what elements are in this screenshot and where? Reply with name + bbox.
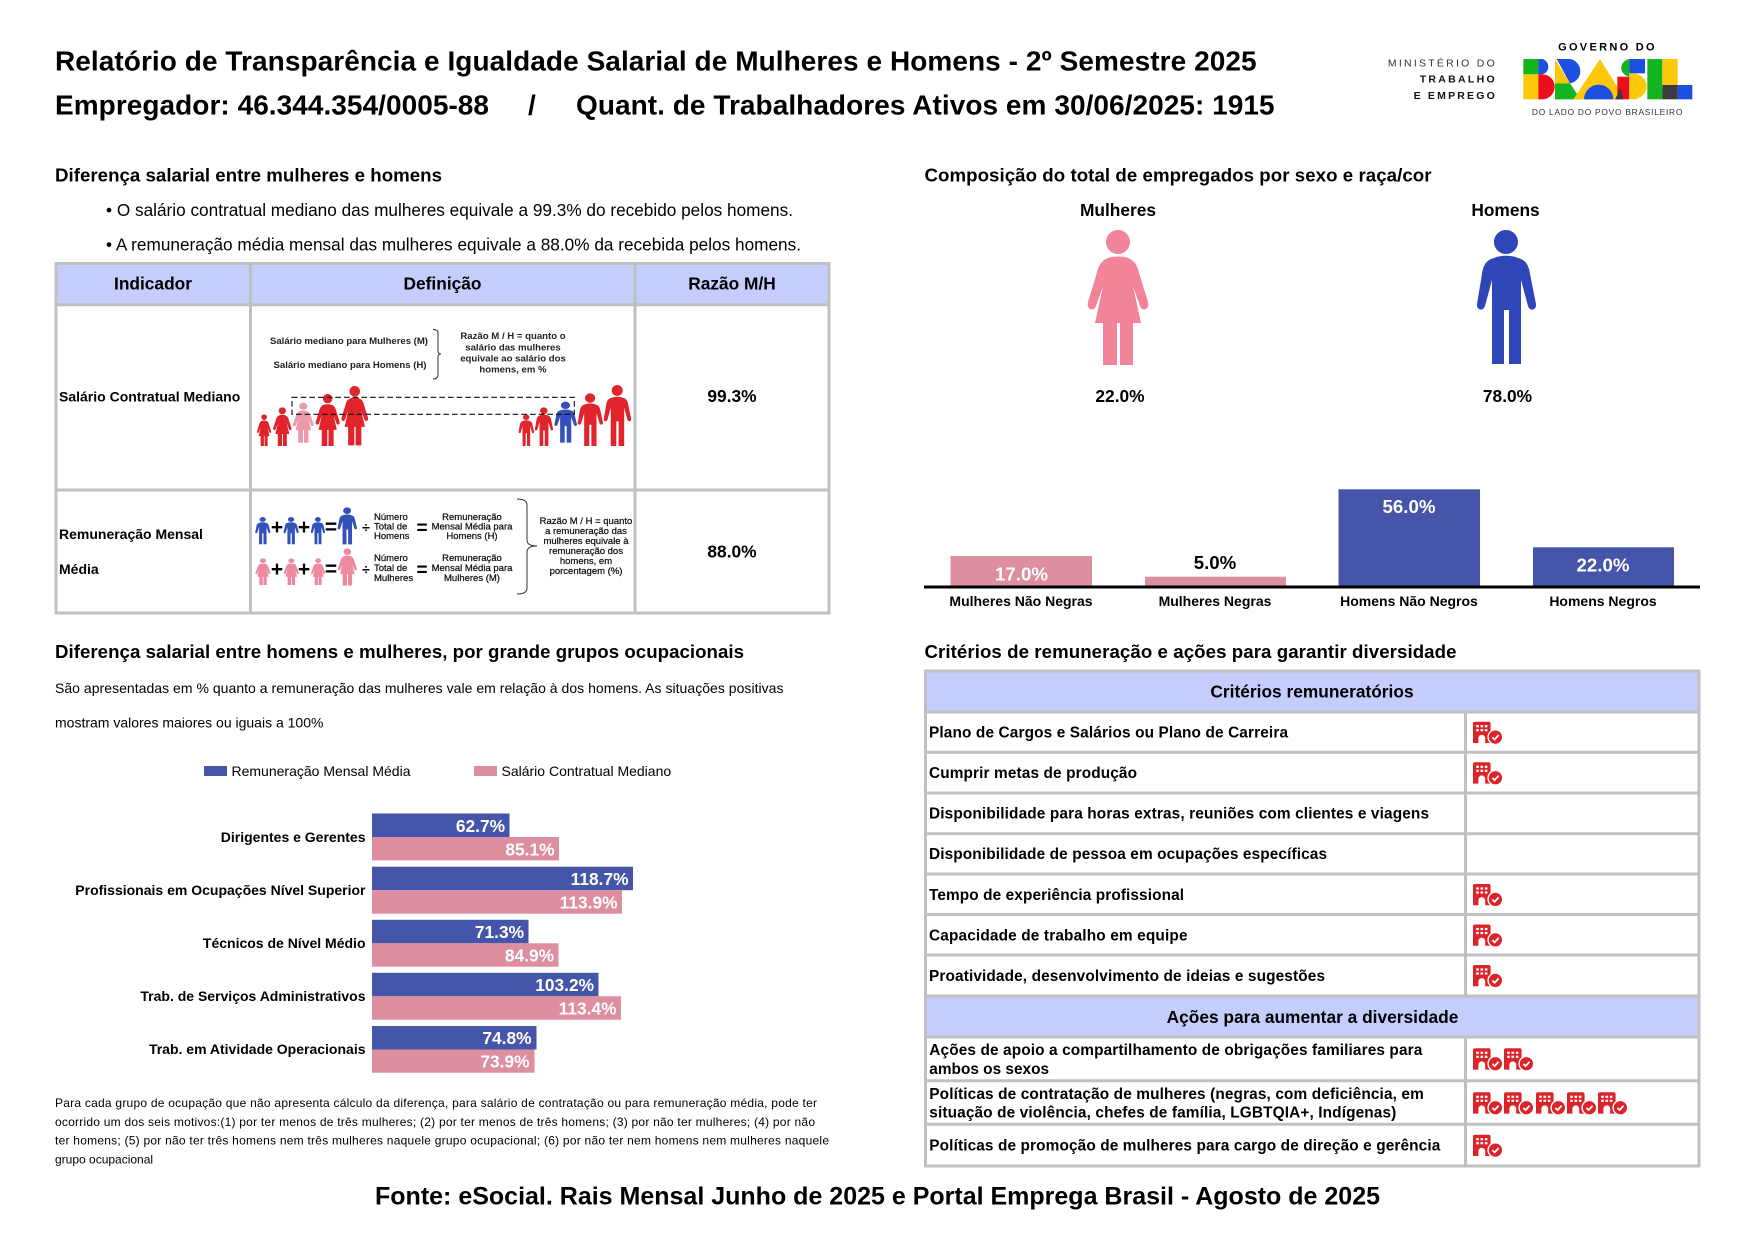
diagram: remuneração média: Mensal Média para — [432, 563, 513, 574]
table: indicadores: Razão M/H — [688, 274, 776, 294]
diagram: remuneração média: ÷ — [362, 519, 370, 535]
bar chart: ocupações: 71.3% — [475, 922, 524, 942]
bar chart: ocupações: Trab. de Serviços Administrativos — [140, 988, 366, 1004]
bar chart: ocupações: 74.8% — [482, 1028, 532, 1048]
bar chart: ocupações: 113.4% — [559, 999, 616, 1019]
diagram: remuneração média: Remuneração — [442, 553, 502, 564]
diagram: remuneração média: Homens (H) — [446, 531, 498, 542]
bar chart: sexo e raça: Homens Negros — [1549, 593, 1657, 609]
table: critérios: Ações de apoio a compartilhamento de obrigações familiares para — [929, 1042, 1423, 1059]
legend: Salário Contratual Mediano — [502, 763, 671, 779]
diagram: remuneração média: Número — [374, 512, 408, 523]
bar chart: ocupações: Profissionais em Ocupações Nível Superior — [75, 882, 366, 898]
diagram: remuneração média: Total de — [374, 563, 407, 574]
diagram: remuneração média: porcentagem (%) — [550, 566, 622, 577]
footnote: ocorrido um dos seis motivos:(1) por ter menos de três mulheres; (2) por ter menos de três homens; (3) por não ter mulheres; (4) por não — [55, 1115, 815, 1129]
diagram: remuneração média: Razão M / H = quanto — [540, 516, 632, 527]
footnote: Para cada grupo de ocupação que não apresenta cálculo da diferença, para salário de contratação ou para remuneração média, pode ter — [55, 1096, 817, 1110]
bar chart: sexo e raça: Mulheres Negras — [1159, 593, 1272, 609]
bullets: • A remuneração média mensal das mulheres equivale a 88.0% da recebida pelos homens. — [106, 234, 801, 254]
diagram: salário mediano — [257, 330, 631, 446]
diagram: remuneração média — [255, 499, 632, 594]
title: Relatório de Transparência e Igualdade Salarial de Mulheres e Homens - 2º Semestre 2025 — [55, 46, 1257, 76]
title: Quant. de Trabalhadores Ativos em 30/06/2025: 1915 — [576, 90, 1275, 120]
diagram: remuneração média: + — [271, 516, 283, 539]
legend — [204, 763, 671, 779]
logo: governo do brasil: DO LADO DO POVO BRASILEIRO — [1532, 107, 1683, 117]
table: critérios: Políticas de contratação de mulheres (negras, com deficiência, em — [929, 1086, 1424, 1103]
title: / — [528, 90, 536, 120]
pictogram: mulheres: Mulheres — [1080, 200, 1156, 220]
bar chart: ocupações — [75, 814, 633, 1073]
panel: grupos ocupacionais — [55, 641, 829, 1166]
table: critérios — [926, 671, 1699, 1166]
table: critérios: Disponibilidade para horas extras, reuniões com clientes e viagens — [929, 806, 1429, 822]
pictogram: homens — [1471, 200, 1540, 406]
footnote: grupo ocupacional — [55, 1152, 153, 1166]
bar chart: sexo e raça: 22.0% — [1577, 554, 1630, 576]
table: indicadores: 99.3% — [707, 386, 757, 406]
table: critérios: Tempo de experiência profissional — [929, 887, 1184, 904]
logo: ministério do trabalho e emprego: MINISTÉRIO DO — [1388, 56, 1497, 70]
table: critérios: Plano de Cargos e Salários ou Plano de Carreira — [929, 724, 1288, 742]
bar chart: ocupações: Trab. em Atividade Operacionais — [149, 1041, 366, 1057]
row: remuneração: Remuneração Mensal — [59, 526, 203, 542]
diagram: remuneração média: + — [298, 558, 310, 581]
heading: Composição do total de empregados por sexo e raça/cor — [924, 164, 1432, 186]
icons: critérios adotados — [1473, 722, 1628, 1158]
diagram: remuneração média: Mulheres (M) — [444, 573, 500, 584]
diagram: remuneração média: ÷ — [362, 561, 370, 577]
diagram: salário mediano: salário das mulheres — [465, 342, 561, 354]
table: critérios: Capacidade de trabalho em equipe — [929, 928, 1188, 944]
table: critérios: Cumprir metas de produção — [929, 765, 1137, 782]
pictogram: mulheres: 22.0% — [1095, 386, 1145, 406]
diagram: remuneração média: Número — [374, 553, 408, 564]
source line: Fonte: eSocial. Rais Mensal Junho de 2025 e Portal Emprega Brasil - Agosto de 2025 — [375, 1182, 1380, 1210]
panel: critérios — [924, 641, 1699, 1166]
table: indicadores: Indicador — [114, 274, 192, 294]
logo: ministério do trabalho e emprego — [1388, 56, 1497, 102]
diagram: remuneração média: Remuneração — [442, 512, 502, 523]
diagram: remuneração média: = — [416, 518, 428, 539]
table: indicadores: Definição — [404, 274, 482, 294]
subtitle — [55, 680, 784, 730]
diagram: remuneração média: Total de — [374, 522, 407, 532]
bullets: • O salário contratual mediano das mulheres equivale a 99.3% do recebido pelos homens. — [106, 200, 793, 220]
logo: ministério do trabalho e emprego: TRABALHO — [1420, 74, 1497, 86]
pictogram: homens: Homens — [1471, 200, 1540, 220]
table: critérios: Ações para aumentar a diversidade — [1167, 1007, 1459, 1027]
footnote: ter homens; (5) por não ter três homens nem três mulheres naquele grupo ocupacional; (6) por não ter nem homens nem mulheres naquele — [55, 1134, 829, 1148]
diagram: salário mediano: Razão M / H = quanto o — [460, 331, 566, 342]
heading: Diferença salarial entre homens e mulheres, por grande grupos ocupacionais — [55, 641, 744, 662]
title — [55, 46, 1275, 120]
heading: Critérios de remuneração e ações para garantir diversidade — [924, 641, 1456, 662]
heading: Diferença salarial entre mulheres e homens — [55, 164, 442, 186]
diagram: remuneração média: remuneração dos — [549, 546, 623, 557]
diagram: salário mediano: homens, em % — [479, 364, 547, 376]
diagram: remuneração média: homens, em — [560, 556, 612, 567]
table: critérios: Políticas de promoção de mulheres para cargo de direção e gerência — [929, 1138, 1441, 1154]
diagram: remuneração média: a remuneração das — [545, 526, 627, 537]
diagram: remuneração média: mulheres equivale à — [543, 536, 629, 547]
diagram: remuneração média: Homens — [374, 531, 410, 542]
diagram: salário mediano: equivale ao salário dos — [460, 354, 566, 364]
bar chart: sexo e raça: Homens Não Negros — [1340, 593, 1478, 609]
title: Empregador: 46.344.354/0005-88 — [55, 90, 489, 120]
diagram: remuneração média: + — [271, 558, 283, 581]
footnote — [55, 1096, 829, 1166]
bar chart: ocupações: 103.2% — [535, 975, 594, 995]
row: salário contratual: Salário Contratual Mediano — [59, 388, 240, 404]
diagram: salário mediano: Salário mediano para Homens (H) — [274, 360, 426, 371]
bar chart: ocupações: 73.9% — [480, 1052, 530, 1072]
bar chart: ocupações: 118.7% — [571, 869, 628, 889]
diagram: salário mediano: Salário mediano para Mulheres (M) — [270, 336, 428, 347]
table: critérios: Disponibilidade de pessoa em ocupações específicas — [929, 846, 1327, 863]
diagram: remuneração média: + — [298, 516, 310, 539]
diagram: remuneração média: Mulheres — [374, 573, 413, 584]
table: indicadores: 88.0% — [707, 542, 757, 562]
panel: composição — [924, 164, 1700, 609]
bar chart: ocupações: 62.7% — [456, 816, 505, 836]
table: critérios: Proatividade, desenvolvimento de ideias e sugestões — [929, 968, 1325, 985]
bar chart: sexo e raça — [924, 489, 1700, 609]
diagram: remuneração média: Mensal Média para — [432, 522, 513, 532]
bar chart: sexo e raça: 56.0% — [1383, 496, 1436, 517]
table: critérios: Critérios remuneratórios — [1210, 682, 1414, 702]
table: critérios: situação de violência, chefes de família, LGBTQIA+, Indígenas) — [929, 1105, 1396, 1122]
diagram: remuneração média: = — [325, 558, 337, 581]
diagram: remuneração média: = — [325, 516, 337, 539]
bar chart: sexo e raça: 17.0% — [995, 564, 1048, 584]
bar chart: sexo e raça: Mulheres Não Negras — [949, 593, 1093, 609]
bar chart: sexo e raça: 5.0% — [1194, 552, 1237, 573]
bar chart: ocupações: Dirigentes e Gerentes — [221, 829, 366, 845]
subtitle: São apresentadas em % quanto a remuneração das mulheres vale em relação à dos homens. As situações positivas — [55, 680, 784, 696]
table: indicadores — [56, 264, 829, 613]
table: critérios: ambos os sexos — [929, 1061, 1049, 1078]
table: indicadores: Média — [59, 561, 99, 577]
bar chart: ocupações: 84.9% — [505, 946, 554, 966]
diagram: remuneração média: = — [416, 560, 428, 581]
bar chart: ocupações: 113.9% — [560, 893, 618, 913]
logo: governo do brasil: GOVERNO DO — [1558, 42, 1657, 54]
bar chart: ocupações: 85.1% — [505, 840, 554, 860]
pictogram: homens: 78.0% — [1483, 386, 1532, 406]
legend: Remuneração Mensal Média — [232, 763, 411, 779]
subtitle: mostram valores maiores ou iguais a 100% — [55, 714, 323, 730]
logo: governo do brasil — [1523, 42, 1692, 117]
bullets — [106, 200, 801, 254]
pictogram: mulheres — [1080, 200, 1156, 406]
logo: ministério do trabalho e emprego: E EMPREGO — [1414, 90, 1497, 102]
bar chart: ocupações: Técnicos de Nível Médio — [203, 935, 366, 951]
panel: diferença salarial — [55, 164, 829, 613]
